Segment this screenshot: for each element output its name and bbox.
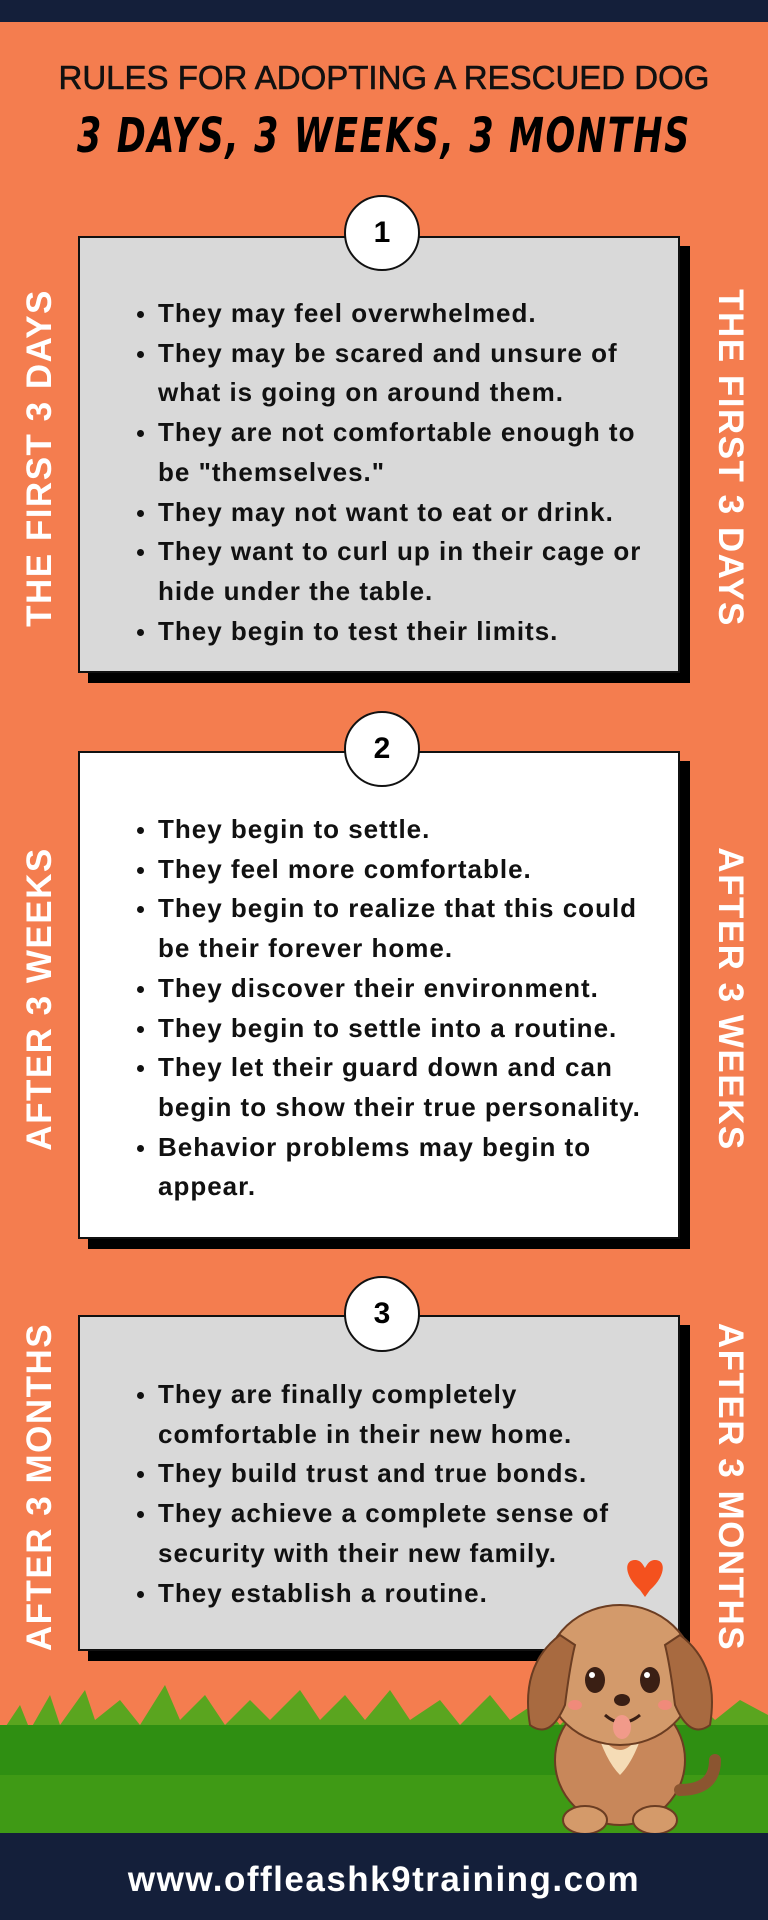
bullet list 3: They achieve a complete sense of [158,1498,609,1528]
number circle 1: 1 [374,216,390,249]
bullet list 2: They discover their environment. [158,973,599,1003]
bullet list 1: be "themselves." [158,457,385,487]
bullet list 3: They are finally completely [158,1379,517,1409]
bullet list 3: security with their new family. [158,1538,557,1568]
panel: after 3 months [78,1315,680,1651]
bullet list 1: They may be scared and unsure of [158,338,618,368]
bullet list 1: They begin to test their limits. [158,616,558,646]
bullet list 3 [137,1379,609,1608]
bullet list 2: Behavior problems may begin to [158,1132,591,1162]
panel: after 3 weeks [78,751,680,1239]
bullet list 3: comfortable in their new home. [158,1419,572,1449]
footer [0,1833,768,1920]
label right 3: AFTER 3 MONTHS [711,1323,750,1651]
bullet list 1: They want to curl up in their cage or [158,536,641,566]
label left 3: AFTER 3 MONTHS [20,1323,59,1651]
bullet list 1 [137,298,641,646]
bullet list 1: hide under the table. [158,576,433,606]
top bar [0,0,768,22]
label right 1: THE FIRST 3 DAYS [711,289,750,627]
bullet list 2: They let their guard down and can [158,1052,613,1082]
bullet list 2: begin to show their true personality. [158,1092,641,1122]
bullet list 1: They may feel overwhelmed. [158,298,537,328]
bullet list 2: They feel more comfortable. [158,854,532,884]
subtitle: 3 DAYS, 3 WEEKS, 3 MONTHS [77,108,691,164]
label left 1: THE FIRST 3 DAYS [20,289,59,627]
number circle 3 [344,1276,420,1352]
title: RULES FOR ADOPTING A RESCUED DOG [59,59,709,96]
website url: www.offleashk9training.com [128,1860,640,1899]
number circle 2 [344,711,420,787]
panel: first 3 days [78,236,680,673]
dog illustration [527,1560,721,1833]
number circle 2: 2 [374,732,390,765]
bullet list 2: be their forever home. [158,933,453,963]
bullet list 2: They begin to settle into a routine. [158,1013,617,1043]
number circle 3: 3 [374,1297,390,1330]
bullet list 2: They begin to settle. [158,814,430,844]
grass [0,1685,768,1833]
label right 2: AFTER 3 WEEKS [711,847,750,1151]
bullet list 1: what is going on around them. [158,377,564,407]
bullet list 3: They build trust and true bonds. [158,1458,587,1488]
number circle 1 [344,195,420,271]
bullet list 2: They begin to realize that this could [158,893,637,923]
bullet list 3: They establish a routine. [158,1578,488,1608]
bullet list 2 [137,814,641,1201]
bullet list 1: They are not comfortable enough to [158,417,635,447]
bullet list 2: appear. [158,1171,256,1201]
label left 2: AFTER 3 WEEKS [20,847,59,1151]
heart [627,1560,663,1597]
bullet list 1: They may not want to eat or drink. [158,497,614,527]
